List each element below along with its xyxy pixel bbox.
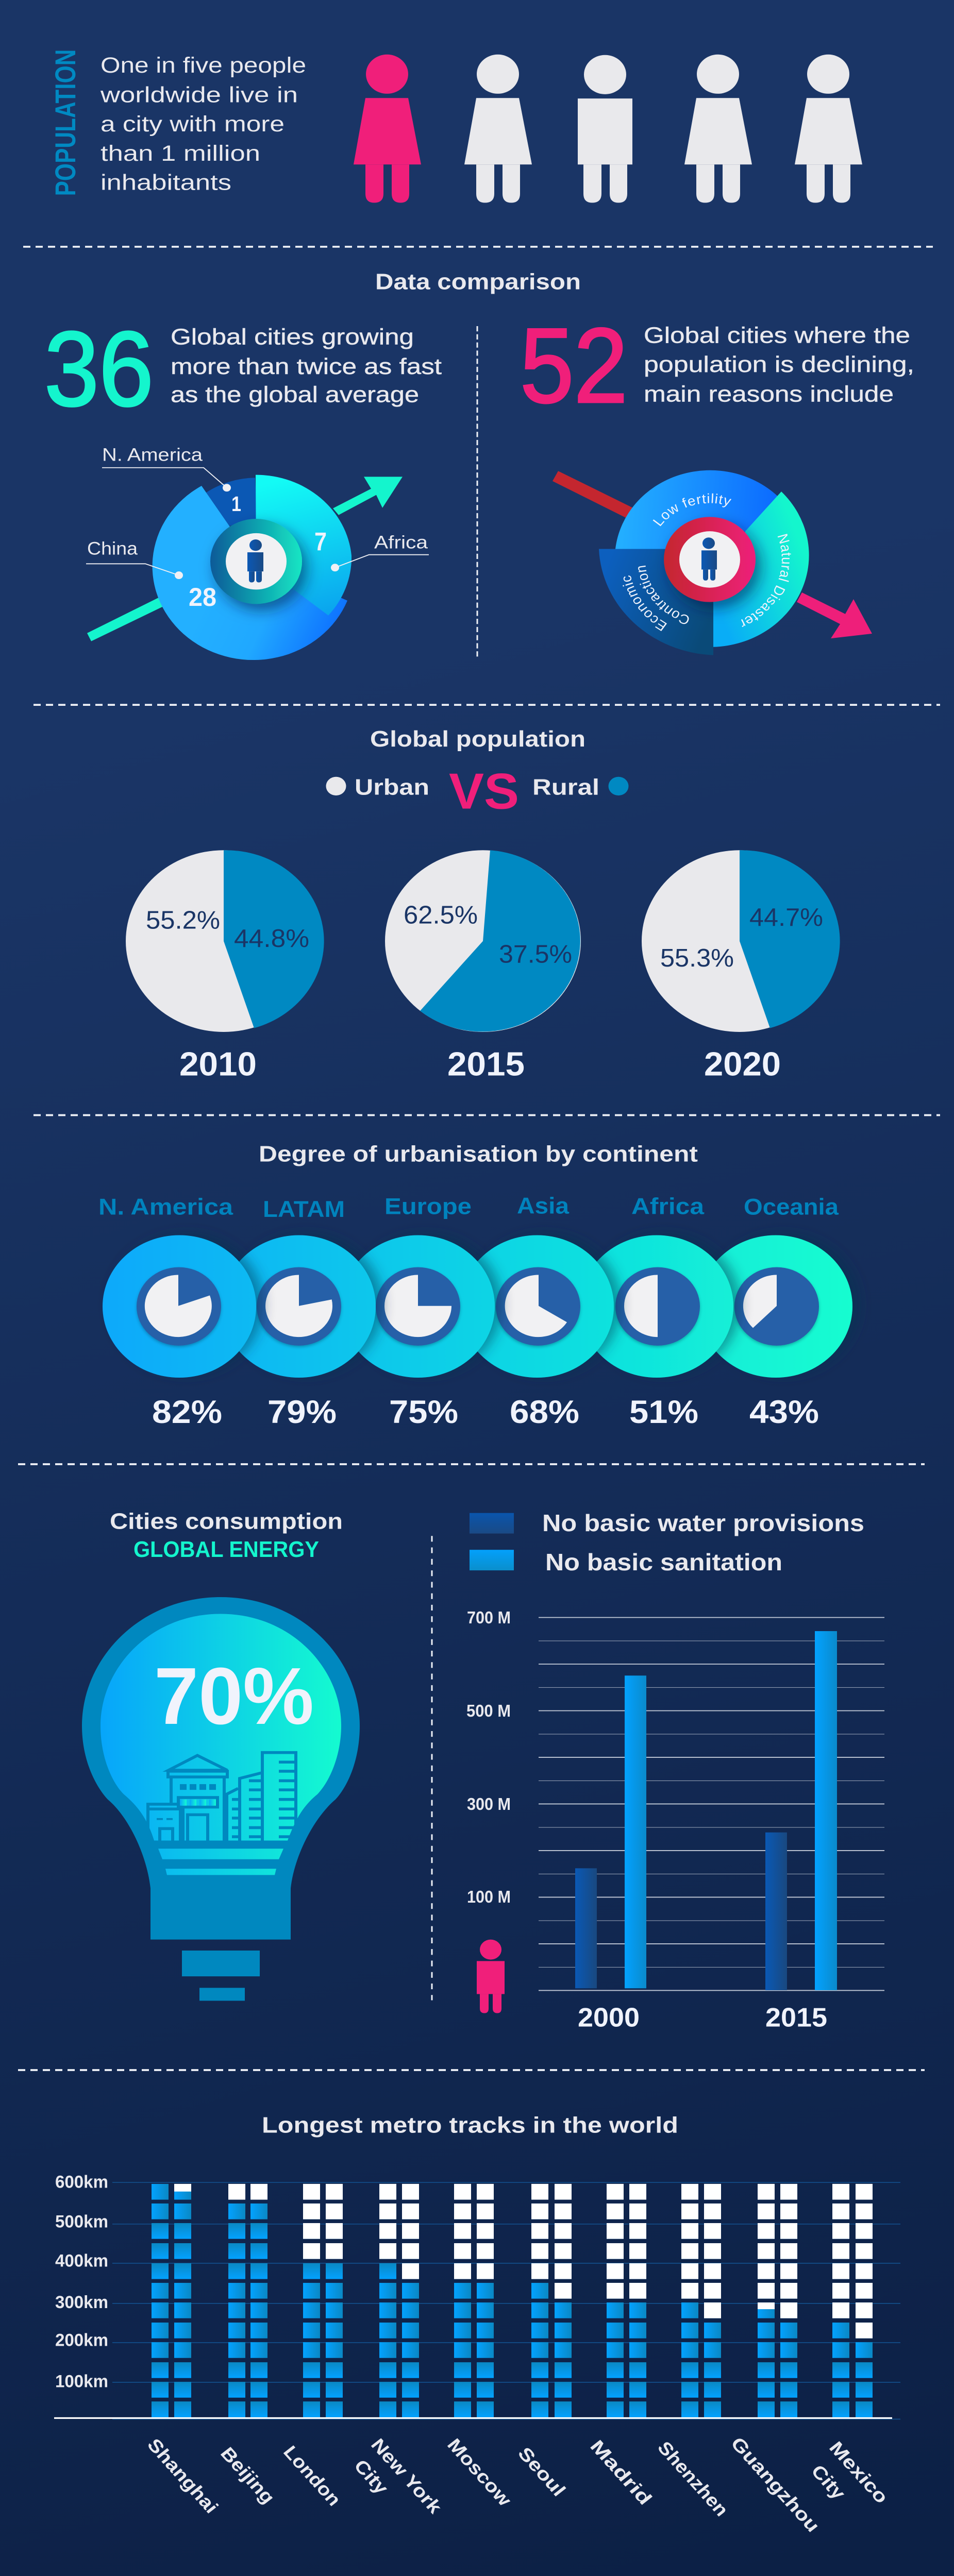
percentage values: 75% xyxy=(389,1394,458,1430)
ring xyxy=(210,519,302,604)
axis labels: 300km xyxy=(55,2292,108,2312)
donut chart: reasons for decline xyxy=(599,470,809,655)
legend: water: No basic water provisions xyxy=(542,1510,864,1537)
x label 2000: 2000 xyxy=(578,2003,640,2032)
text block: growing cities: more than twice as fast xyxy=(171,353,442,379)
columns: Moscow xyxy=(454,2184,494,2417)
value 7: 7 xyxy=(314,528,327,556)
heading: Longest metro tracks in the world xyxy=(262,2112,678,2138)
icon: grey person 2 xyxy=(464,55,532,203)
city labels: Moscow xyxy=(443,2435,516,2510)
bars 2015 xyxy=(765,1631,837,1990)
pie chart: 2015: 37.5% xyxy=(499,940,572,968)
sector: N. America xyxy=(206,478,257,526)
continent labels: Asia xyxy=(517,1193,570,1218)
text block: declining cities: main reasons include xyxy=(644,381,894,406)
icon: pink person xyxy=(354,55,421,203)
axis labels: 500km xyxy=(55,2212,108,2231)
ring xyxy=(664,517,756,602)
city labels: Shanghai xyxy=(143,2435,223,2517)
baseline xyxy=(54,2417,892,2419)
text block: declining cities: Global cities where the xyxy=(644,323,910,348)
text block: one in five: worldwide live in xyxy=(100,83,298,107)
pie chart: 2015 xyxy=(385,850,581,1032)
text block: one in five xyxy=(100,54,306,195)
continent labels: N. America xyxy=(98,1194,233,1219)
city labels: Guangzhou xyxy=(727,2433,824,2536)
percentage values: 43% xyxy=(749,1394,819,1430)
heading: Cities consumption xyxy=(110,1509,343,1534)
sector: China xyxy=(153,486,347,660)
vertical label: POPULATION: POPULATION xyxy=(49,49,81,196)
label: economic: Economic xyxy=(623,575,667,631)
percentage values: 79% xyxy=(267,1394,337,1430)
subheading: GLOBAL ENERGY xyxy=(133,1537,319,1562)
continent labels: LATAM xyxy=(263,1196,345,1222)
callout: N. America xyxy=(102,445,231,492)
columns: New York City xyxy=(379,2184,419,2417)
legend: urban vs rural: Rural xyxy=(532,774,599,800)
city labels: Seoul xyxy=(514,2444,570,2500)
continent labels xyxy=(98,1193,839,1222)
icon: person xyxy=(247,539,263,582)
columns: Seoul xyxy=(531,2184,572,2417)
axis labels: 400km xyxy=(55,2251,108,2270)
panel: water and sanitation xyxy=(466,1510,884,2032)
year 2020: 2020 xyxy=(704,1046,781,1083)
city labels: Mexico xyxy=(825,2437,893,2507)
donut chart: growing cities by region xyxy=(153,475,352,660)
icon: grey person 3 xyxy=(578,55,632,203)
heading: Global population xyxy=(370,726,585,751)
x label 2015: 2015 xyxy=(765,2003,827,2032)
icon: grey person 4 xyxy=(684,55,752,203)
city labels: City xyxy=(807,2461,850,2503)
centre disc xyxy=(226,533,287,589)
axis labels: 100 M xyxy=(467,1888,511,1907)
panel: global population xyxy=(126,726,840,1083)
continent labels: Oceania xyxy=(744,1194,839,1219)
text block: one in five: a city with more xyxy=(101,112,284,137)
axis labels: 100km xyxy=(55,2371,108,2391)
text block: growing cities: Global cities growing xyxy=(171,324,414,349)
callout: Africa xyxy=(331,532,429,571)
value 28: 28 xyxy=(189,583,216,612)
text block: one in five: One in five people xyxy=(101,54,306,78)
axis labels: 700 M xyxy=(467,1608,511,1628)
city labels xyxy=(143,2433,893,2536)
icon: pink person scale xyxy=(477,1940,505,2013)
heading: Degree of urbanisation by continent xyxy=(259,1141,698,1166)
text block: declining cities xyxy=(644,323,914,406)
axis labels: 500 M xyxy=(466,1702,511,1721)
pie chart: 2015: 62.5% xyxy=(404,901,478,929)
centre disc xyxy=(679,531,740,588)
percentage values: 51% xyxy=(629,1394,698,1430)
arrow: pink down xyxy=(797,592,872,638)
legend: urban vs rural: VS xyxy=(449,762,519,820)
text block: one in five: than 1 million xyxy=(101,141,260,165)
value 1: 1 xyxy=(231,493,241,516)
pie chart: 2020 xyxy=(642,850,840,1032)
legend: urban vs rural xyxy=(326,762,629,820)
pie chart: 2010: 55.2% xyxy=(146,906,220,934)
big number 36: 36 xyxy=(44,310,154,428)
icon: light bulb xyxy=(82,1597,360,2001)
pie chart: 2010 xyxy=(126,850,324,1032)
pie chart: 2020: 55.3% xyxy=(660,944,734,972)
pie chart: 2010: 44.8% xyxy=(234,924,309,952)
city labels: London xyxy=(279,2442,345,2510)
percentage values: 68% xyxy=(510,1394,579,1430)
sector: Africa xyxy=(256,475,352,616)
legend: urban vs rural: Urban xyxy=(355,774,429,800)
label: natural disaster: Natural Disaster xyxy=(741,534,791,627)
panel: 52 declining cities xyxy=(520,307,914,655)
text block: growing cities xyxy=(171,324,442,407)
sector: economic contraction xyxy=(599,549,713,655)
disc: Oceania xyxy=(699,1235,852,1378)
panel: 36 growing cities xyxy=(44,310,442,660)
heading: data comparison: Data comparison xyxy=(375,269,581,294)
city labels: Shenzhen xyxy=(654,2437,733,2520)
percentage values xyxy=(152,1394,819,1430)
arrow: red shaft xyxy=(553,471,633,518)
columns: Guangzhou xyxy=(758,2184,797,2417)
bars 2000 xyxy=(575,1675,646,1988)
callout: Africa: Africa xyxy=(374,532,428,552)
city labels: New York xyxy=(367,2435,446,2517)
continent labels: Europe xyxy=(384,1193,472,1219)
axis labels: 600km xyxy=(55,2172,108,2192)
disc: Asia xyxy=(460,1235,614,1378)
panel: population xyxy=(49,49,862,203)
disc: Africa xyxy=(580,1235,733,1378)
sector: natural disaster xyxy=(713,492,809,647)
grid lines xyxy=(112,2182,900,2419)
label: contraction: Contraction xyxy=(638,566,689,624)
columns: Shenzhen xyxy=(681,2184,721,2417)
city labels: City xyxy=(350,2456,393,2498)
columns: Mexico City xyxy=(832,2184,873,2417)
axis labels: 200km xyxy=(55,2330,108,2350)
sector: low fertility xyxy=(615,470,780,560)
columns: Shanghai xyxy=(152,2184,191,2417)
disc: Europe xyxy=(341,1235,495,1378)
panel: metro tracks xyxy=(54,2112,900,2536)
city labels: Madrid xyxy=(586,2436,656,2509)
disc: LATAM xyxy=(222,1235,376,1378)
icon: city skyline xyxy=(148,1753,296,1840)
city labels: Beijing xyxy=(216,2444,279,2507)
text block: declining cities: population is declining, xyxy=(644,352,914,377)
year 2010: 2010 xyxy=(179,1046,257,1083)
callout: N. America: N. America xyxy=(102,445,203,465)
value: 70%: 70% xyxy=(154,1651,314,1741)
callout: China: China xyxy=(87,538,138,558)
columns: Madrid xyxy=(607,2184,646,2417)
columns: London xyxy=(303,2184,343,2417)
axis labels xyxy=(55,2172,108,2391)
arrow: teal up xyxy=(87,477,403,641)
disc: N. America xyxy=(103,1235,256,1378)
icon: person xyxy=(701,537,717,581)
grid lines xyxy=(539,1618,884,1990)
legend: sanitation: No basic sanitation xyxy=(545,1549,782,1576)
axis labels xyxy=(466,1608,511,1907)
columns: Beijing xyxy=(228,2184,267,2417)
callout: China xyxy=(86,538,183,579)
label: low fertility: Low fertility xyxy=(652,494,732,527)
pie chart: 2020: 44.7% xyxy=(749,903,823,931)
icon: grey person 5 xyxy=(795,55,862,203)
bar chart xyxy=(466,1608,884,2032)
panel: urbanisation by continent xyxy=(98,1141,852,1430)
text block: one in five: inhabitants xyxy=(101,171,231,195)
percentage values: 82% xyxy=(152,1394,222,1430)
text block: growing cities: as the global average xyxy=(171,382,419,407)
big number 52: 52 xyxy=(520,307,628,425)
axis labels: 300 M xyxy=(467,1795,511,1814)
panel: cities consumption xyxy=(82,1509,360,2001)
continent labels: Africa xyxy=(631,1193,705,1219)
year 2015: 2015 xyxy=(447,1046,525,1083)
